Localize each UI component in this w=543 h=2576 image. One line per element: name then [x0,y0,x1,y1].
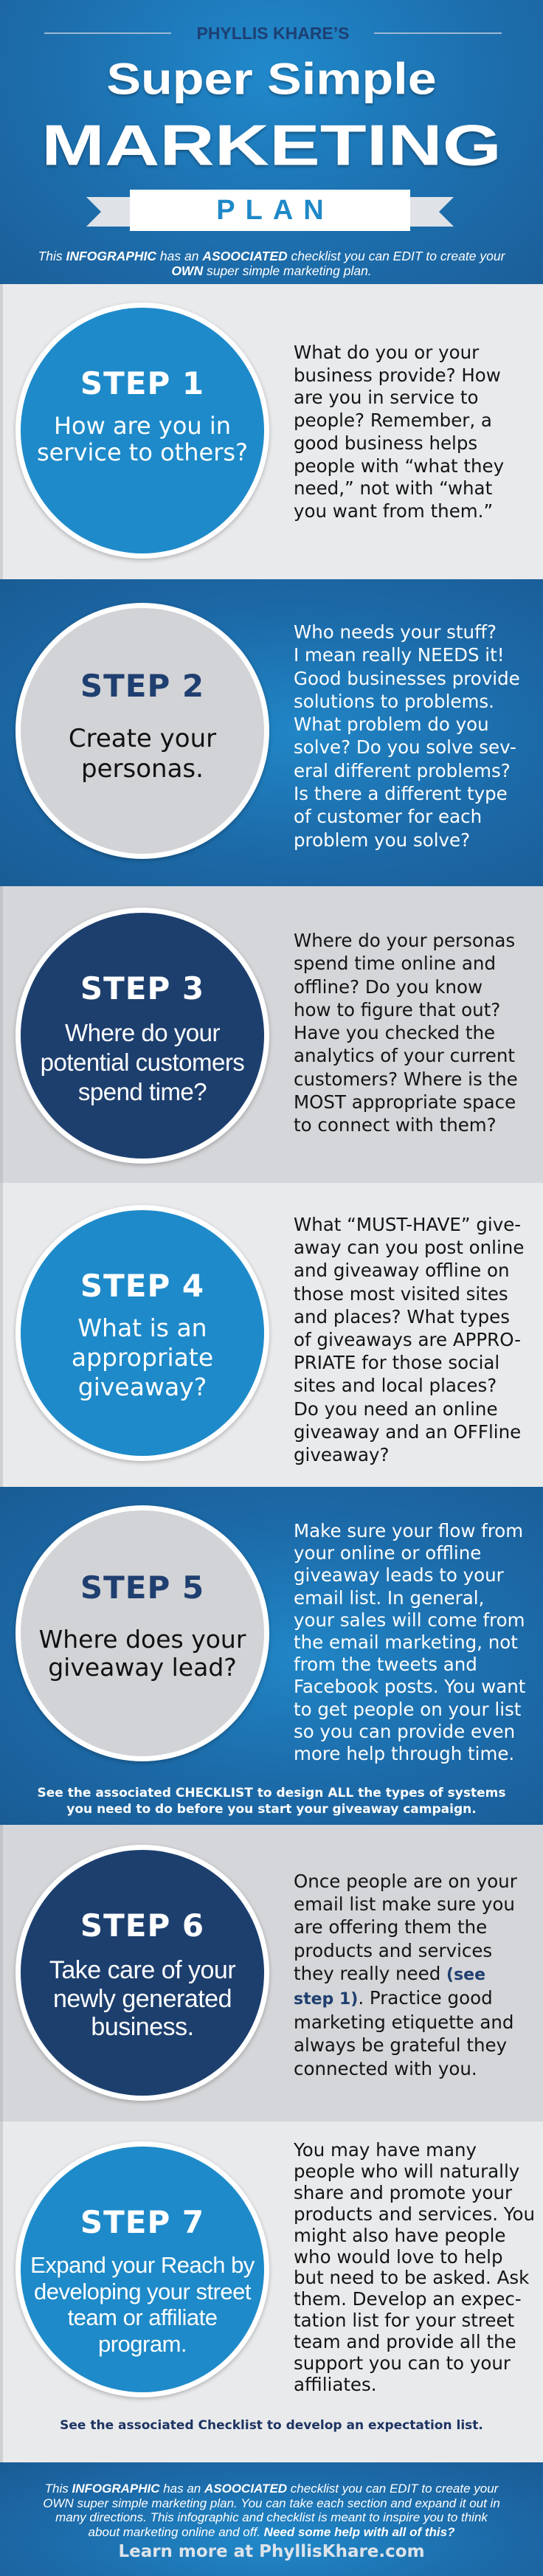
step 2 body text: of customer for each [294,806,482,827]
step 5 checklist callout: See the associated CHECKLIST to design ALL the types of systems [37,1786,506,1800]
step 2 body text: problem you solve? [294,829,470,851]
step 2 body text: solve? Do you solve sev- [294,736,516,758]
step 1 body text: good business helps [294,432,477,454]
step 2 body text: Good businesses provide [294,668,520,689]
step 2 subtitle: personas. [81,754,204,784]
step 5 body text [294,1520,525,1764]
step 6 body text: marketing etiquette and [294,2012,513,2033]
step 6 body text: always be grateful they [294,2034,507,2056]
ribbon: PLAN [86,190,454,231]
step 4 body text: and giveaway offline on [294,1260,510,1281]
step 5 subtitle [39,1625,246,1682]
step 5 checklist callout: you need to do before you start your giveaway campaign. [66,1802,477,1817]
step 1 subtitle: How are you in [54,412,231,440]
panel: step 1 [0,284,543,579]
step 3 body text: analytics of your current [294,1045,515,1066]
step 4 body text: away can you post online [294,1237,524,1258]
step 7 body text: You may have many [294,2139,477,2161]
step 3 heading: STEP 3 [80,970,204,1006]
step 6 heading: STEP 6 [80,1907,204,1944]
step 1 body text: What do you or your [294,342,479,363]
step 3 body text: MOST appropriate space [294,1091,516,1113]
step 7 body text: affiliates. [294,2374,377,2395]
header intro text: OWN super simple marketing plan. [171,263,372,278]
step 3 body text: how to figure that out? [294,999,500,1021]
step 7 subtitle [30,2252,255,2357]
step 3 body text: Where do your personas [294,930,515,951]
step 1 subtitle [37,412,248,466]
step 4 circle [15,1205,269,1461]
step 1 heading: STEP 1 [80,365,204,401]
step 2 circle [15,603,269,859]
step 7 body text: people who will naturally [294,2161,519,2182]
step 7 body text: tation list for your street [294,2310,514,2331]
step 7 subtitle: program. [98,2331,187,2357]
step 6 circle [15,1845,269,2101]
step 5 body text: your sales will come from [294,1609,525,1631]
panel: step 3 [0,886,543,1183]
header [0,0,543,284]
step 4 body text: giveaway? [294,1444,390,1465]
step 7 body text: might also have people [294,2225,505,2246]
step 6 subtitle: Take care of your [49,1956,235,1984]
step 1 body text [294,342,504,522]
step 6 subtitle [49,1956,236,2041]
step 3 body text: spend time online and [294,953,496,974]
step 7 body text: support you can to your [294,2352,511,2374]
step 2 body text: Who needs your stuff? [294,621,497,643]
panel: step 7 [0,2121,543,2462]
footer text [43,2482,500,2539]
step 5 subtitle: giveaway lead? [48,1653,237,1682]
step 1 body text: need,” not with “what [294,477,492,499]
panel: step 4 [0,1183,543,1487]
footer [0,2462,543,2576]
step 6 body text: products and services [294,1940,492,1961]
footer text: This INFOGRAPHIC has an ASOOCIATED checklist you can EDIT to create your [45,2482,498,2496]
step 5 heading: STEP 5 [80,1570,204,1606]
step 3 body text: Have you checked the [294,1022,495,1043]
title: Super Simple: Super Simple [106,54,437,104]
step 6 body text: step 1). Practice good [294,1987,493,2009]
step 6 body text [294,1871,517,2079]
step 3 body text [294,930,518,1136]
footer text: about marketing online and off. Need some help with all of this? [89,2525,454,2539]
step 2 subtitle: Create your [69,724,216,753]
panel: step 6 [0,1825,543,2121]
step 2 body text: What problem do you [294,714,489,735]
step 3 circle [15,908,269,1164]
step 3 subtitle: Where do your [65,1019,220,1046]
header intro text: This INFOGRAPHIC has an ASOOCIATED checklist you can EDIT to create your [38,249,505,263]
step 5 body text: email list. In general, [294,1587,484,1609]
step 5 body text: to get people on your list [294,1699,521,1720]
step 5 body text: so you can provide even [294,1721,515,1742]
step 1 body text: business provide? How [294,365,501,386]
step 4 body text: Do you need an online [294,1398,498,1420]
step 7 body text: who would love to help [294,2246,503,2268]
step 7 body text: them. Develop an expec- [294,2288,522,2310]
step 2 heading: STEP 2 [80,668,204,704]
step 4 heading: STEP 4 [80,1268,204,1304]
step 5 circle [15,1505,269,1761]
step 7 body text: share and promote your [294,2182,512,2203]
step 1 body text: you want from them.” [294,500,493,522]
step 5 body text: Make sure your flow from [294,1520,523,1541]
step 2 body text: Is there a different type [294,783,508,804]
step 4 body text: of giveaways are APPRO- [294,1329,521,1350]
step 4 body text: PRIATE for those social [294,1352,499,1373]
step 3 subtitle: potential customers [41,1049,244,1076]
step 2 body text: solutions to problems. [294,691,494,712]
footer text: OWN super simple marketing plan. You can take each section and expand it out in [43,2496,500,2510]
step 7 circle [15,2141,269,2397]
step 4 body text: giveaway and an OFFline [294,1421,521,1443]
step 5 body text: more help through time. [294,1743,514,1764]
step 4 body text: and places? What types [294,1306,510,1327]
step 1 subtitle: service to others? [37,438,248,466]
step 1 body text: are you in service to [294,387,478,408]
step 7 subtitle: team or affiliate [68,2304,217,2330]
step 5 body text: from the tweets and [294,1654,477,1675]
step 5 body text: the email marketing, not [294,1631,518,1653]
ribbon: PLAN: PLAN [216,195,334,226]
step 4 subtitle: What is an [77,1313,207,1342]
step 2 subtitle [69,724,217,784]
panel: step 2 [0,579,543,886]
step 7 body text: team and provide all the [294,2331,516,2352]
step 7 body text: products and services. You [294,2203,535,2225]
step 3 body text: offline? Do you know [294,976,483,998]
footer text: many directions. This infographic and checklist is meant to inspire you to think [55,2510,488,2524]
step 6 body text: they really need (see [294,1963,485,1984]
step 4 subtitle [72,1313,213,1401]
step 6 body text: are offering them the [294,1916,487,1938]
header kicker: Phyllis Khare's: PHYLLIS KHARE’S [196,24,350,43]
step 5 body text: Facebook posts. You want [294,1676,525,1697]
step 6 body text: email list make sure you [294,1893,515,1915]
step 5 subtitle: Where does your [39,1625,246,1654]
step 2 body text: I mean really NEEDS it! [294,644,505,666]
step 1 body text: people with “what they [294,455,504,477]
step 6 body text: connected with you. [294,2058,477,2079]
step 5 checklist callout [37,1786,506,1817]
step 4 body text: those most visited sites [294,1283,508,1305]
header intro text [38,249,505,278]
step 4 body text [294,1214,524,1465]
step 7 subtitle: developing your street [34,2279,251,2304]
step 4 subtitle: appropriate [72,1343,213,1372]
footer link text: Learn more at PhyllisKhare.com [118,2542,425,2561]
step 5 body text: your online or offline [294,1542,481,1564]
step 4 subtitle: giveaway? [78,1372,207,1401]
step 7 subtitle: Expand your Reach by [30,2252,255,2278]
step 4 body text: What “MUST-HAVE” give- [294,1214,521,1235]
step 1 circle [15,303,269,559]
step 6 subtitle: newly generated [53,1985,232,2013]
step 1 body text: people? Remember, a [294,410,492,431]
title: MARKETING: MARKETING [41,113,502,177]
step 2 body text [294,621,520,851]
step 5 body text: giveaway leads to your [294,1564,504,1586]
panel: step 5 [0,1487,543,1825]
step 7 body text [294,2139,535,2395]
step 7 heading: STEP 7 [80,2204,204,2240]
step 3 subtitle [41,1019,244,1105]
step 2 body text: eral different problems? [294,760,511,781]
step 3 subtitle: spend time? [78,1078,207,1105]
step 6 subtitle: business. [91,2013,194,2041]
step 6 body text: Once people are on your [294,1871,517,1892]
step 4 body text: sites and local places? [294,1375,497,1396]
step 3 body text: to connect with them? [294,1114,497,1136]
step 3 body text: customers? Where is the [294,1068,518,1089]
step 7 body text: but need to be asked. Ask [294,2267,529,2288]
step 7 checklist callout: See the associated Checklist to develop an expectation list. [60,2418,483,2433]
